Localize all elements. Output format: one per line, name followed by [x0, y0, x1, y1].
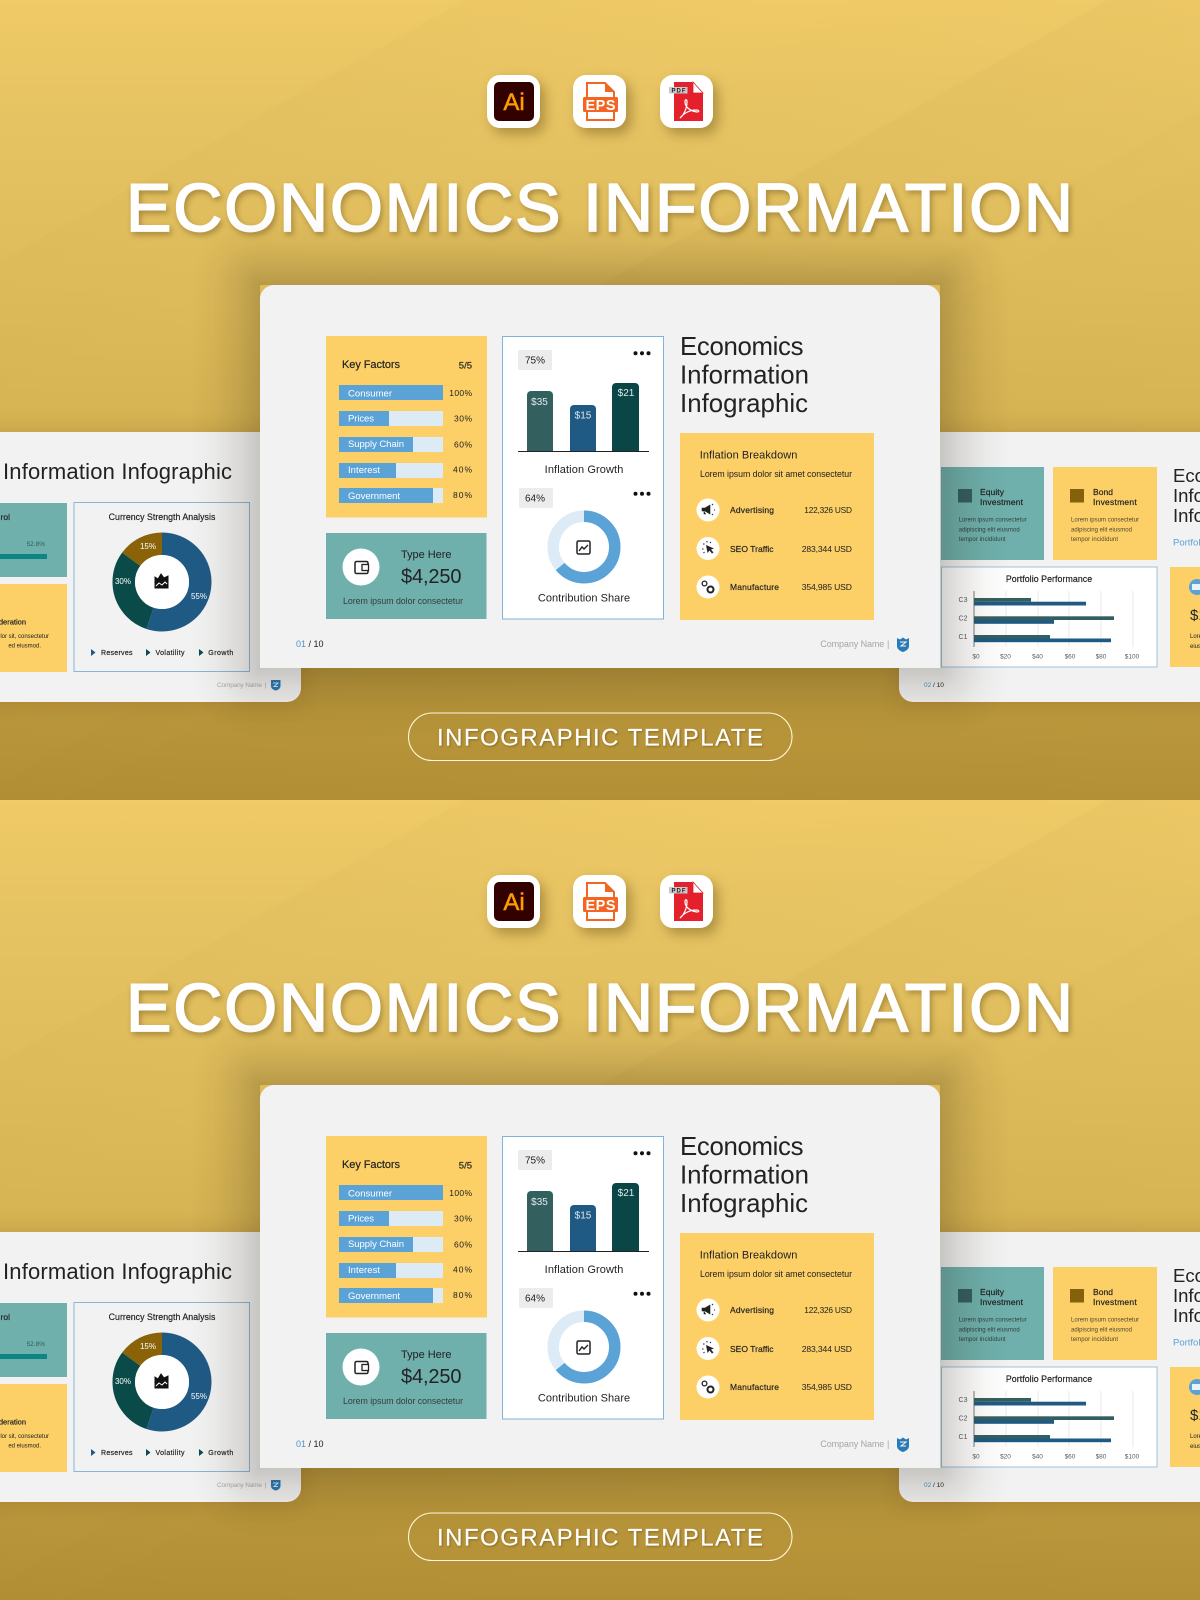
- bar: Supply Chain: 60%: [454, 440, 472, 450]
- bar chart: inflation growth: Inflation Growth: [545, 464, 623, 476]
- bar: Government: 80%: [453, 1290, 472, 1300]
- donut chart: 30%: [115, 1377, 131, 1386]
- panel: wallet stat: Lorem ipsum dolor consectetur: [343, 596, 463, 606]
- title: ECONOMICS INFORMATION: [126, 170, 1073, 246]
- row: Advertising: Advertising: [730, 505, 774, 515]
- icon: PDF file: PDF: [672, 89, 686, 95]
- heading: [680, 1133, 809, 1218]
- panel: equity investment: adipiscing elit eiusmod: [959, 527, 1020, 533]
- heading: [1173, 465, 1200, 548]
- bar chart: portfolio performance: $60: [1065, 1454, 1076, 1460]
- panel: inflation breakdown: [680, 1233, 874, 1420]
- bar: Consumer: [339, 385, 472, 400]
- panel: charts: [502, 336, 664, 619]
- bar: Supply Chain: [339, 1237, 472, 1252]
- row: Manufacture: Manufacture: [730, 582, 779, 592]
- legend: [91, 1449, 233, 1457]
- panel: bond investment: Lorem ipsum consectetur: [1071, 518, 1139, 524]
- row: SEO Traffic: 283,344 USD: [802, 544, 852, 554]
- icon: EPS file: [573, 875, 626, 928]
- icon: Adobe Illustrator: [487, 875, 540, 928]
- bar: Government: Government: [348, 1291, 400, 1302]
- bar chart: portfolio performance: [942, 1367, 1157, 1467]
- file format icons: [487, 75, 713, 128]
- heading: Information Infographic: [3, 1259, 232, 1284]
- bar chart: inflation growth: $35: [531, 397, 548, 408]
- row: Manufacture: [696, 1376, 852, 1398]
- icon: wallet: [342, 1348, 380, 1386]
- panel: control card: rol: [1, 512, 10, 522]
- panel: control card: [0, 1303, 67, 1377]
- panel: right side slide: [899, 1232, 1200, 1502]
- bar: Prices: Prices: [348, 1214, 374, 1224]
- bar: Government: [339, 488, 472, 503]
- bar chart: inflation growth: $35: [531, 1197, 548, 1208]
- background: [0, 0, 1200, 800]
- panel: currency strength: Currency Strength Analysis: [109, 512, 216, 522]
- panel: currency strength: [74, 1302, 250, 1472]
- bar: Prices: [339, 1211, 472, 1226]
- bar: Consumer: [339, 1185, 472, 1200]
- panel: wallet stat: [326, 533, 486, 619]
- panel: equity investment: Equity: [980, 487, 1005, 497]
- panel: wallet stat: Type Here: [401, 549, 452, 561]
- icon: PDF file: PDF: [672, 889, 686, 895]
- heading: Infographic: [680, 1190, 808, 1218]
- row: Manufacture: 354,985 USD: [802, 1382, 852, 1392]
- row: SEO Traffic: [696, 1337, 852, 1360]
- panel: wallet stat: $4,250: [401, 566, 462, 588]
- footer: company: [820, 1438, 909, 1452]
- panel: moderation card: ed eiusmod.: [8, 1444, 41, 1450]
- row: Advertising: 122,326 USD: [804, 1305, 852, 1315]
- footer: left slide: Company Name: [217, 1482, 262, 1489]
- badge: infographic template: INFOGRAPHIC TEMPLATE: [437, 724, 763, 752]
- footer: right slide: 02 / 10: [924, 1482, 944, 1489]
- legend: [91, 649, 233, 657]
- bar chart: portfolio performance: Portfolio Performance: [1006, 1374, 1092, 1384]
- bar: Prices: [339, 411, 472, 426]
- badge: infographic template: [408, 1513, 792, 1560]
- donut chart: contribution share: [519, 488, 650, 604]
- panel: control card: 52.8%: [27, 1341, 45, 1348]
- donut chart: [115, 1342, 207, 1420]
- icon: wallet: [342, 548, 380, 586]
- side card shadows: [0, 432, 1200, 702]
- panel: inflation breakdown: Inflation Breakdown: [700, 1249, 797, 1261]
- bar chart: portfolio performance: $100: [1125, 1454, 1140, 1460]
- bar chart: portfolio performance: $40: [1032, 654, 1043, 660]
- bar chart: portfolio performance: $20: [1000, 654, 1011, 660]
- panel: main slide: [260, 1085, 940, 1468]
- donut chart: 15%: [140, 1342, 156, 1351]
- legend: Volatility: [156, 650, 185, 657]
- bar: Interest: Interest: [348, 1265, 380, 1276]
- row: Advertising: 122,326 USD: [804, 505, 852, 515]
- panel: key factors: 5/5: [459, 360, 472, 372]
- panel: equity investment: Investment: [980, 1297, 1024, 1307]
- panel: equity investment: Lorem ipsum consectetur: [959, 1318, 1027, 1324]
- footer: left slide: Company Name: [217, 682, 262, 689]
- footer: left slide: [217, 1480, 280, 1490]
- panel: control card: rol: [1, 1312, 10, 1322]
- bar: Prices: Prices: [348, 414, 374, 424]
- donut chart: contribution share: Contribution Share: [538, 592, 630, 604]
- row: Manufacture: Manufacture: [730, 1382, 779, 1392]
- bar chart: inflation growth: $21: [618, 388, 635, 399]
- heading: [680, 333, 809, 418]
- bar chart: portfolio performance: $20: [1000, 1454, 1011, 1460]
- bar chart: portfolio performance: $40: [1032, 1454, 1043, 1460]
- bar: Consumer: Consumer: [348, 388, 392, 400]
- legend: Growth: [208, 650, 233, 657]
- row: Advertising: [696, 498, 852, 522]
- heading: Information: [680, 362, 809, 390]
- bar chart: inflation growth: [518, 350, 650, 476]
- panel: bond investment: [1053, 467, 1157, 560]
- panel: inflation breakdown: [680, 433, 874, 620]
- panel: equity investment: Investment: [980, 497, 1024, 507]
- legend: Volatility: [156, 1450, 185, 1457]
- donut chart: contribution share: [519, 1288, 650, 1404]
- bar: Interest: [339, 463, 472, 478]
- panel: moderation card: [0, 584, 67, 672]
- panel: left side slide: [0, 432, 301, 702]
- donut chart: 30%: [115, 577, 131, 586]
- footer: pagination: 01 / 10: [296, 1439, 324, 1449]
- icon: Adobe Illustrator: Ai: [503, 89, 525, 116]
- main card shadow: [190, 1015, 1010, 1538]
- panel: wallet stat: $4,250: [401, 1366, 462, 1388]
- panel: bond investment: Bond: [1093, 1287, 1113, 1297]
- bar: Consumer: Consumer: [348, 1188, 392, 1200]
- bar chart: inflation growth: Inflation Growth: [545, 1264, 623, 1276]
- panel: bond investment: adipiscing elit eiusmod: [1071, 1327, 1132, 1333]
- heading: Information: [680, 1162, 809, 1190]
- donut chart: contribution share: 64%: [525, 494, 545, 504]
- bar chart: inflation growth: $15: [575, 1210, 592, 1222]
- panel: currency strength: [74, 502, 250, 672]
- icon: EPS file: EPS: [586, 98, 616, 114]
- donut chart: contribution share: Contribution Share: [538, 1392, 630, 1404]
- legend: Reserves: [101, 1450, 133, 1457]
- footer: right slide: 02 / 10: [924, 682, 944, 689]
- bar: Interest: 40%: [453, 464, 472, 474]
- bar chart: portfolio performance: $0: [972, 654, 980, 660]
- background: [0, 800, 1200, 1600]
- donut chart: [115, 542, 207, 620]
- bar: Interest: 40%: [453, 1264, 472, 1274]
- panel: wallet stat: Type Here: [401, 1349, 452, 1361]
- panel: key factors: 5/5: [459, 1160, 472, 1172]
- footer: company: [820, 638, 909, 652]
- panel: moderation card: ed eiusmod.: [8, 644, 41, 650]
- bar chart: portfolio performance: [942, 567, 1157, 667]
- footer: company: Company Name: [820, 1439, 884, 1449]
- bar chart: inflation growth: [518, 1150, 650, 1276]
- panel: inflation breakdown: Lorem ipsum dolor sit amet consectetur: [700, 1269, 852, 1279]
- panel: equity investment: tempor incididunt: [959, 1337, 1006, 1343]
- legend: Reserves: [101, 650, 133, 657]
- icon: PDF file: [660, 75, 713, 128]
- panel: equity investment: [941, 467, 1044, 560]
- main card shadow: [190, 215, 1010, 738]
- legend: Growth: [208, 1450, 233, 1457]
- panel: key factors: Key Factors: [342, 1159, 400, 1171]
- panel: moderation card: [0, 1384, 67, 1472]
- row: SEO Traffic: [696, 537, 852, 560]
- section: top template preview: [0, 0, 1200, 800]
- footer: company: Company Name: [820, 639, 884, 649]
- bar: Interest: Interest: [348, 465, 380, 476]
- section: bottom template preview: [0, 800, 1200, 1600]
- panel: currency strength: Currency Strength Analysis: [109, 1312, 216, 1322]
- bar chart: portfolio performance: $80: [1096, 654, 1107, 660]
- panel: wallet stat: Lorem ipsum dolor consectetur: [343, 1396, 463, 1406]
- bar: Supply Chain: 60%: [454, 1240, 472, 1250]
- icon: Adobe Illustrator: [487, 75, 540, 128]
- bar: Prices: 30%: [454, 414, 472, 424]
- panel: main slide: [260, 285, 940, 668]
- panel: equity investment: tempor incididunt: [959, 537, 1006, 543]
- bar chart: portfolio performance: C2: [959, 1416, 968, 1422]
- bar chart: portfolio performance: Portfolio Performance: [1006, 574, 1092, 584]
- footer: left slide: |: [264, 1482, 266, 1489]
- side card shadows: [0, 1232, 1200, 1502]
- footer: company: |: [887, 1439, 889, 1449]
- bar: Consumer: 100%: [449, 1188, 472, 1198]
- bar: Supply Chain: [339, 437, 472, 452]
- badge: infographic template: INFOGRAPHIC TEMPLATE: [437, 1524, 763, 1552]
- heading: [1173, 1265, 1200, 1348]
- panel: right stat card: [1170, 567, 1200, 667]
- bar chart: portfolio performance: $80: [1096, 1454, 1107, 1460]
- panel: bond investment: Investment: [1093, 1297, 1137, 1307]
- bar chart: portfolio performance: $60: [1065, 654, 1076, 660]
- bar chart: inflation growth: $15: [575, 410, 592, 422]
- heading: Economics: [680, 1133, 804, 1161]
- bar chart: inflation growth: 75%: [525, 1156, 545, 1166]
- panel: equity investment: adipiscing elit eiusmod: [959, 1327, 1020, 1333]
- footer: company: |: [887, 639, 889, 649]
- panel: key factors: [326, 1136, 487, 1318]
- bar chart: portfolio performance: C3: [959, 1397, 968, 1404]
- panel: wallet stat: [326, 1333, 486, 1419]
- row: SEO Traffic: SEO Traffic: [730, 1344, 774, 1354]
- heading: Infographic: [680, 390, 808, 418]
- donut chart: contribution share: 64%: [525, 1294, 545, 1304]
- bar chart: portfolio performance: C2: [959, 616, 968, 622]
- row: Advertising: Advertising: [730, 1305, 774, 1315]
- panel: control card: [0, 503, 67, 577]
- file format icons: [487, 875, 713, 928]
- row: Manufacture: [696, 576, 852, 598]
- panel: equity investment: Equity: [980, 1287, 1005, 1297]
- footer: left slide: [217, 680, 280, 690]
- panel: moderation card: lor sit, consectetur: [0, 634, 49, 640]
- bar chart: portfolio performance: C1: [959, 1434, 968, 1441]
- bar: Government: Government: [348, 491, 400, 502]
- panel: left side slide: [0, 1232, 301, 1502]
- panel: bond investment: [1053, 1267, 1157, 1360]
- panel: moderation card: lor sit, consectetur: [0, 1434, 49, 1440]
- bar: Government: [339, 1288, 472, 1303]
- panel: inflation breakdown: Lorem ipsum dolor sit amet consectetur: [700, 469, 852, 479]
- panel: key factors: [326, 336, 487, 518]
- panel: right side slide: [899, 432, 1200, 702]
- bar chart: inflation growth: 75%: [525, 356, 545, 366]
- panel: bond investment: adipiscing elit eiusmod: [1071, 527, 1132, 533]
- panel: bond investment: Bond: [1093, 487, 1113, 497]
- panel: equity investment: [941, 1267, 1044, 1360]
- title: ECONOMICS INFORMATION: [126, 970, 1073, 1046]
- row: SEO Traffic: 283,344 USD: [802, 1344, 852, 1354]
- footer: left slide: |: [264, 682, 266, 689]
- bar chart: portfolio performance: C3: [959, 597, 968, 604]
- panel: charts: [502, 1136, 664, 1419]
- icon: EPS file: [573, 75, 626, 128]
- donut chart: 55%: [191, 592, 207, 601]
- badge: infographic template: [408, 713, 792, 760]
- row: Manufacture: 354,985 USD: [802, 582, 852, 592]
- row: Advertising: [696, 1298, 852, 1322]
- bar: Prices: 30%: [454, 1214, 472, 1224]
- donut chart: 55%: [191, 1392, 207, 1401]
- bar chart: portfolio performance: C1: [959, 634, 968, 641]
- bar: Supply Chain: Supply Chain: [348, 439, 404, 450]
- icon: PDF file: [660, 875, 713, 928]
- panel: equity investment: Lorem ipsum consectetur: [959, 518, 1027, 524]
- panel: bond investment: tempor incididunt: [1071, 1337, 1118, 1343]
- bar: Supply Chain: Supply Chain: [348, 1239, 404, 1250]
- panel: control card: 52.8%: [27, 541, 45, 548]
- heading: Information Infographic: [3, 459, 232, 484]
- panel: bond investment: Lorem ipsum consectetur: [1071, 1318, 1139, 1324]
- panel: right stat card: [1170, 1367, 1200, 1467]
- panel: key factors: Key Factors: [342, 359, 400, 371]
- row: SEO Traffic: SEO Traffic: [730, 544, 774, 554]
- heading: Economics: [680, 333, 804, 361]
- panel: bond investment: Investment: [1093, 497, 1137, 507]
- footer: pagination: 01 / 10: [296, 639, 324, 649]
- bar chart: portfolio performance: $100: [1125, 654, 1140, 660]
- bar chart: portfolio performance: $0: [972, 1454, 980, 1460]
- donut chart: 15%: [140, 542, 156, 551]
- bar: Consumer: 100%: [449, 388, 472, 398]
- panel: inflation breakdown: Inflation Breakdown: [700, 449, 797, 461]
- icon: EPS file: EPS: [586, 898, 616, 914]
- icon: Adobe Illustrator: Ai: [503, 889, 525, 916]
- panel: bond investment: tempor incididunt: [1071, 537, 1118, 543]
- bar chart: inflation growth: $21: [618, 1188, 635, 1199]
- bar: Government: 80%: [453, 490, 472, 500]
- bar: Interest: [339, 1263, 472, 1278]
